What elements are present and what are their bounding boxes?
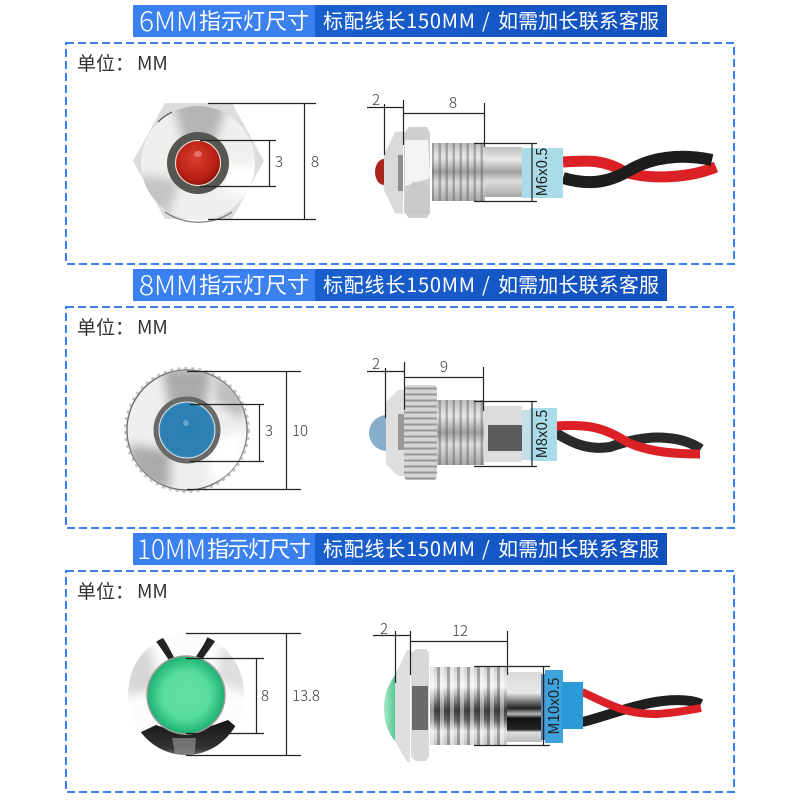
banner: 10MM: 10MM bbox=[137, 528, 206, 567]
unit label 10MM: MM bbox=[137, 577, 168, 604]
dimension lines: front 8MM: 3 bbox=[265, 420, 273, 441]
dimension lines: side 8MM: 2 bbox=[372, 353, 380, 374]
banner: 10MM: 指示灯尺寸 bbox=[207, 532, 311, 564]
panel: 6MM dimensions bbox=[66, 43, 734, 264]
dimension lines: side 8MM: 9 bbox=[440, 356, 448, 377]
dimension lines: side 10MM: 12 bbox=[452, 620, 468, 641]
banner: 6MM: / bbox=[482, 5, 490, 34]
dimension lines: side 6MM: 8 bbox=[449, 92, 457, 113]
banner: 6MM bbox=[133, 0, 667, 39]
banner: 10MM: 如需加长联系客服 bbox=[498, 533, 659, 562]
banner: 10MM: / bbox=[482, 533, 490, 562]
panel: 8MM dimensions bbox=[66, 307, 734, 528]
unit label 8MM: MM bbox=[137, 313, 168, 340]
unit label 8MM: 单位： bbox=[77, 313, 134, 340]
banner: 8MM bbox=[133, 264, 667, 303]
banner: 10MM bbox=[133, 528, 667, 567]
unit label 6MM: 单位： bbox=[77, 49, 134, 76]
dimension lines: side 8MM bbox=[367, 353, 552, 466]
cables 6MM bbox=[563, 157, 716, 182]
dimension lines: front 6MM: 8 bbox=[311, 151, 319, 172]
cables 10MM bbox=[582, 692, 701, 722]
side view: 6MM red lamp bbox=[375, 127, 716, 218]
banner: 6MM: 6MM bbox=[139, 0, 198, 39]
dimension lines: side 8MM: M8x0.5 bbox=[531, 410, 552, 458]
dimension lines: side 10MM: M10x0.5 bbox=[543, 677, 564, 735]
front view: 6MM red lamp bbox=[130, 95, 264, 225]
dimension lines: side 10MM: 2 bbox=[380, 618, 388, 639]
banner: 8MM: 指示灯尺寸 bbox=[199, 268, 309, 300]
unit label 6MM bbox=[77, 49, 168, 76]
dimension lines: side 6MM bbox=[367, 89, 552, 202]
front view: 10MM green lamp bbox=[128, 637, 244, 755]
dimension lines: front 6MM bbox=[200, 104, 319, 220]
banner: 8MM: / bbox=[482, 269, 490, 298]
banner: 8MM: 标配线长150MM bbox=[323, 269, 475, 298]
unit label 10MM: 单位： bbox=[77, 577, 134, 604]
dimension lines: side 10MM bbox=[373, 618, 564, 746]
side view: 10MM green lamp bbox=[384, 649, 701, 762]
banner: 6MM: 如需加长联系客服 bbox=[498, 5, 659, 34]
dimension lines: side 6MM: M6x0.5 bbox=[531, 148, 552, 196]
unit label 6MM: MM bbox=[137, 49, 168, 76]
banner: 6MM: 指示灯尺寸 bbox=[199, 4, 309, 36]
unit label 8MM bbox=[77, 313, 168, 340]
panel: 10MM dimensions bbox=[66, 571, 734, 792]
banner: 8MM: 8MM bbox=[139, 264, 198, 303]
unit label 10MM bbox=[77, 577, 168, 604]
cables 8MM bbox=[556, 426, 701, 454]
dimension lines: front 10MM: 8 bbox=[261, 685, 269, 706]
dimension lines: front 8MM bbox=[187, 372, 308, 490]
front view: 8MM blue lamp bbox=[126, 368, 250, 492]
dimension lines: front 6MM: 3 bbox=[275, 151, 283, 172]
banner: 10MM: 标配线长150MM bbox=[323, 533, 475, 562]
dimension lines: side 6MM: 2 bbox=[372, 89, 380, 110]
side view: 8MM blue lamp bbox=[369, 385, 701, 480]
dimension lines: front 10MM bbox=[186, 634, 320, 756]
dimension lines: front 10MM: 13.8 bbox=[292, 685, 320, 706]
banner: 8MM: 如需加长联系客服 bbox=[498, 269, 659, 298]
banner: 6MM: 标配线长150MM bbox=[323, 5, 475, 34]
dimension lines: front 8MM: 10 bbox=[292, 420, 308, 441]
